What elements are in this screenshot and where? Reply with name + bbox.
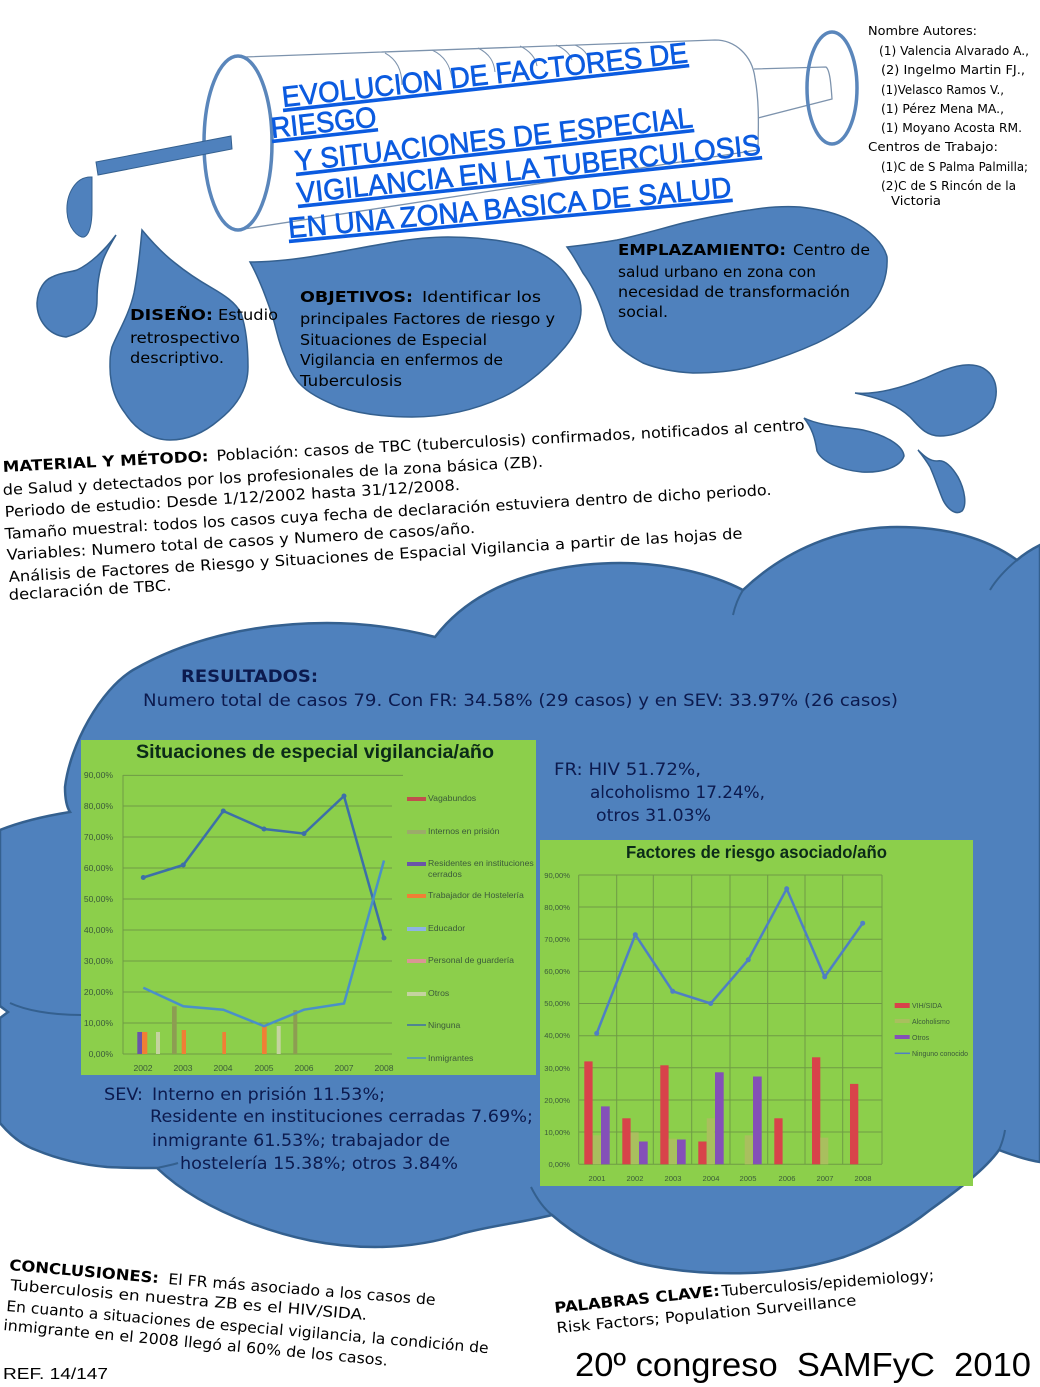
panel: emplazamiento: EMPLAZAMIENTO: [618,241,786,259]
authors: (1) Pérez Mena MA., [881,102,1004,116]
y axis labels: 20,00% [84,987,113,997]
text block: SEV: SEV: [104,1085,143,1105]
text block: SEV: hostelería 15.38%; otros 3.84% [180,1154,458,1174]
reference number: REF. 14/147 [3,1366,108,1383]
panel: objetivos: Vigilancia en enfermos de [300,351,503,369]
heading: resultados: Numero total de casos 79. Con FR: 34.58% (29 casos) y en SEV: 33.97% (26 casos) [143,691,898,711]
legend [895,1003,968,1058]
title [269,37,762,245]
x axis labels: 2001 [589,1174,605,1183]
text block: material y método [2,415,805,604]
y axis labels: 70,00% [544,935,570,944]
panel: diseño: Estudio [218,306,278,324]
syringe graduations [385,45,588,85]
x axis labels: 2008 [855,1174,871,1183]
legend: Otros [912,1035,930,1042]
x axis labels: 2007 [334,1063,354,1073]
x axis labels: 2006 [294,1063,314,1073]
heading: resultados: RESULTADOS: [181,667,318,687]
text block: material y método: Periodo de estudio: Desde 1/12/2002 hasta 31/12/2008. [4,476,460,521]
icon: right drops [804,365,996,513]
y axis labels [544,871,570,1169]
bars: alcoholismo [593,1118,828,1164]
panel: emplazamiento: Centro de [793,241,870,259]
panel: objetivos: Tuberculosis [299,372,402,390]
y axis labels: 50,00% [84,894,113,904]
text block: material y método: Variables: Numero total de casos y Numero de casos/año. [6,519,475,564]
chart: factores de riesgo [540,840,973,1186]
y axis labels: 80,00% [84,801,113,811]
syringe flange [807,32,857,144]
text block: material y método: MATERIAL Y MÉTODO: [2,446,209,476]
x axis labels: 2005 [254,1063,274,1073]
y axis labels: 60,00% [84,863,113,873]
line: ninguna [141,794,386,940]
legend: Ninguno conocido [912,1051,968,1058]
y axis labels: 30,00% [84,956,113,966]
authors: (1)Velasco Ramos V., [881,83,1004,97]
text block: conclusiones: El FR más asociado a los casos de [168,1270,436,1309]
y axis labels: 50,00% [544,999,570,1008]
y axis labels: 90,00% [84,770,113,780]
authors: (1) Valencia Alvarado A., [879,44,1029,58]
panel: objetivos: principales Factores de riesgo y [300,310,555,328]
text block: FR: FR: HIV 51.72%, [554,760,701,780]
x axis labels [133,1063,394,1073]
panel: objetivos: OBJETIVOS: [300,288,413,306]
text block: material y método: de Salud y detectados por los profesionales de la zona básica (ZB). [2,453,543,499]
x axis labels: 2004 [703,1174,719,1183]
text block: material y método: Tamaño muestral: todos los casos cuya fecha de declaración estuviera dentro de dicho periodo. [3,481,772,543]
legend: Residentes en instituciones [428,858,534,868]
y axis labels: 60,00% [544,967,570,976]
text block: SEV: Residente en instituciones cerradas 7.69%; [150,1107,533,1127]
text block: conclusiones: CONCLUSIONES: [9,1256,160,1287]
text block: conclusiones: inmigrante en el 2008 llegó al 60% de los casos. [3,1316,389,1370]
bars [137,1006,297,1054]
panel: objetivos [250,237,581,417]
legend: Ninguna [428,1020,461,1030]
heading: resultados [143,667,898,711]
text block: SEV [104,1085,533,1174]
authors: (2)C de S Rincón de la [881,179,1016,193]
y axis labels: 0,00% [548,1160,570,1169]
text block: material y método: Población: casos de TBC (tuberculosis) confirmados, notificados al centro [216,416,805,465]
panel: diseño: descriptivo. [130,349,224,367]
text block: SEV: inmigrante 61.53%; trabajador de [152,1131,450,1151]
text block: conclusiones: Tuberculosis en nuestra ZB es el HIV/SIDA. [9,1276,368,1324]
y axis labels: 80,00% [544,903,570,912]
panel: emplazamiento [567,207,887,373]
y axis labels [84,770,113,1059]
text block: conclusiones: En cuanto a situaciones de especial vigilancia, la condición de [6,1297,489,1357]
x axis labels: 2007 [817,1174,833,1183]
y axis labels: 40,00% [544,1031,570,1040]
y axis labels: 10,00% [544,1128,570,1137]
text block: SEV: Interno en prisión 11.53%; [152,1085,385,1105]
authors: (1) Moyano Acosta RM. [881,121,1022,135]
y axis labels: 70,00% [84,832,113,842]
grid [579,875,882,1164]
legend: Alcoholismo [912,1019,950,1026]
legend: Internos en prisión [428,826,500,836]
chart title: Factores de riesgo asociado/año [626,842,887,862]
y axis labels: 10,00% [84,1018,113,1028]
title: EVOLUCION DE FACTORES DE [280,37,689,114]
x axis labels: 2002 [133,1063,153,1073]
authors: (2) Ingelmo Martin FJ., [881,63,1025,77]
legend: Personal de guardería [428,955,514,965]
x axis labels: 2003 [665,1174,681,1183]
icon: top left drop [67,177,92,237]
panel: objetivos: Situaciones de Especial [300,331,487,349]
panel: objetivos: Identificar los [422,288,541,306]
y axis labels: 0,00% [89,1049,113,1059]
authors: Nombre Autores: [868,24,977,38]
y axis labels: 90,00% [544,871,570,880]
title: Y SITUACIONES DE ESPECIAL [293,102,694,178]
text block: palabras clave [554,1266,935,1337]
text block: material y método: declaración de TBC. [8,576,172,604]
text block: palabras clave: PALABRAS CLAVE: [554,1282,721,1317]
syringe plunger [96,136,232,175]
title: EN UNA ZONA BASICA DE SALUD [287,172,733,245]
panel: emplazamiento: salud urbano en zona con [618,263,816,281]
line: ninguno conocido [594,886,865,1036]
line: inmigrantes [143,860,384,1026]
legend: cerrados [428,869,462,879]
x axis labels: 2003 [173,1063,193,1073]
chart: situaciones de especial vigilancia [81,740,536,1075]
panel: diseño: DISEÑO: [130,305,213,324]
x axis labels: 2004 [213,1063,233,1073]
text block: conclusiones [3,1256,489,1370]
syringe barrel [244,40,758,229]
legend: Inmigrantes [428,1053,474,1063]
panel: emplazamiento: necesidad de transformación [618,283,850,301]
legend: Educador [428,923,465,933]
y axis labels: 40,00% [84,925,113,935]
text block: palabras clave: Tuberculosis/epidemiology; [720,1266,935,1300]
y axis labels: 30,00% [544,1064,570,1073]
icon: syringe [96,32,857,230]
panel: diseño: retrospectivo [130,329,240,347]
syringe nozzle [754,67,832,118]
authors [868,24,1029,208]
bars: otros [601,1072,762,1164]
x axis labels: 2005 [740,1174,756,1183]
x axis labels: 2006 [779,1174,795,1183]
legend [407,793,534,1063]
text block: FR [554,760,765,826]
title: VIGILANCIA EN LA TUBERCULOSIS [295,129,762,210]
icon: small left drop [37,235,116,337]
y axis labels: 20,00% [544,1096,570,1105]
grid [123,775,403,1054]
text block: FR: alcoholismo 17.24%, [590,783,765,803]
authors: Victoria [891,194,941,208]
background cloud [0,527,1040,1273]
panel: emplazamiento: social. [618,303,668,321]
title: RIESGO [269,102,378,145]
authors: (1)C de S Palma Palmilla; [881,160,1028,174]
legend: Trabajador de Hostelería [428,890,524,900]
x axis labels: 2002 [627,1174,643,1183]
text block: material y método: Análisis de Factores de Riesgo y Situaciones de Espacial Vigilancia a partir de las hojas de [8,524,743,586]
x axis labels [589,1174,871,1183]
bars: VIH/SIDA [584,1057,858,1164]
authors: Centros de Trabajo: [868,140,998,154]
x axis labels: 2008 [374,1063,394,1073]
legend: Otros [428,988,450,998]
panel: diseño [110,230,278,440]
syringe back ellipse [204,56,272,230]
chart title: Situaciones de especial vigilancia/año [136,742,494,763]
congress label: 20º congreso SAMFyC 2010 [575,1346,1031,1383]
text block: palabras clave: Risk Factors; Population Surveillance [556,1291,857,1337]
legend: Vagabundos [428,793,477,803]
legend: VIH/SIDA [912,1003,942,1010]
text block: FR: otros 31.03% [596,806,711,826]
cloud inner seams [10,560,1017,1215]
